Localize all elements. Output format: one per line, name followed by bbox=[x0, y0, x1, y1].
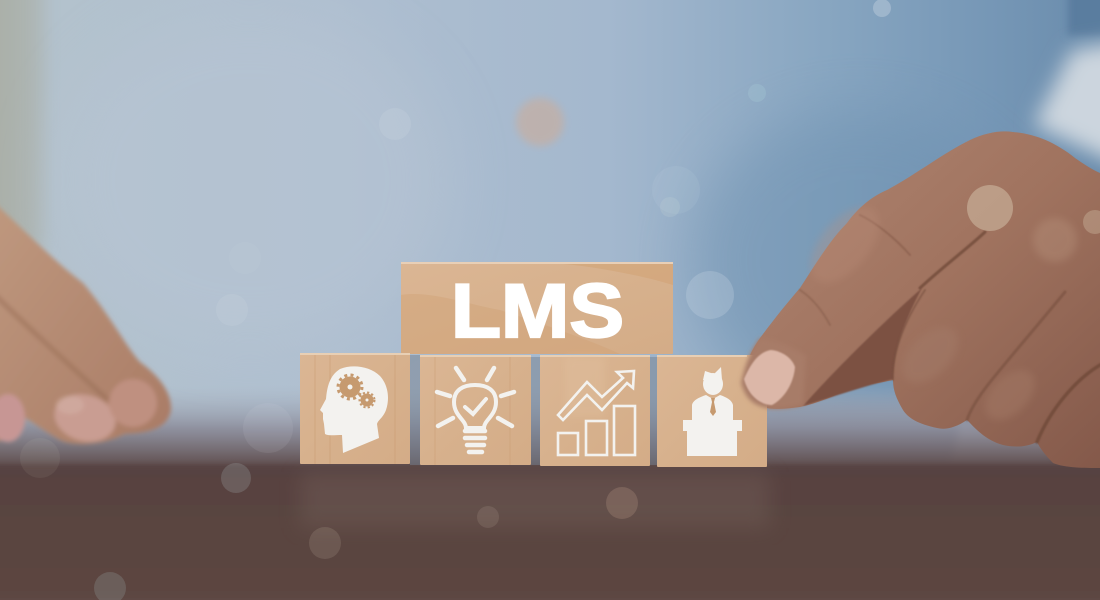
icon: bars and arrow bbox=[558, 371, 635, 455]
fingertip overlapping cube 4 bbox=[741, 338, 806, 409]
left hand bbox=[0, 190, 171, 448]
cube 3: growth chart bbox=[540, 355, 657, 466]
icon: head and gears bbox=[320, 366, 388, 453]
right hand bbox=[741, 131, 1100, 468]
icon: person at podium bbox=[683, 367, 742, 456]
cube 4: speaker at podium bbox=[657, 355, 767, 467]
finger creases and knuckles bbox=[800, 215, 1100, 442]
table surface bbox=[0, 385, 1100, 600]
block label: LMS bbox=[451, 269, 624, 354]
cube 2: light bulb bbox=[420, 355, 540, 465]
middle-finger web shadow bbox=[803, 288, 922, 406]
thumbnail bbox=[744, 350, 795, 405]
LMS top block bbox=[401, 262, 673, 354]
icon: light bulb with check bbox=[437, 368, 514, 452]
cube 1: head with gears bbox=[300, 353, 420, 465]
